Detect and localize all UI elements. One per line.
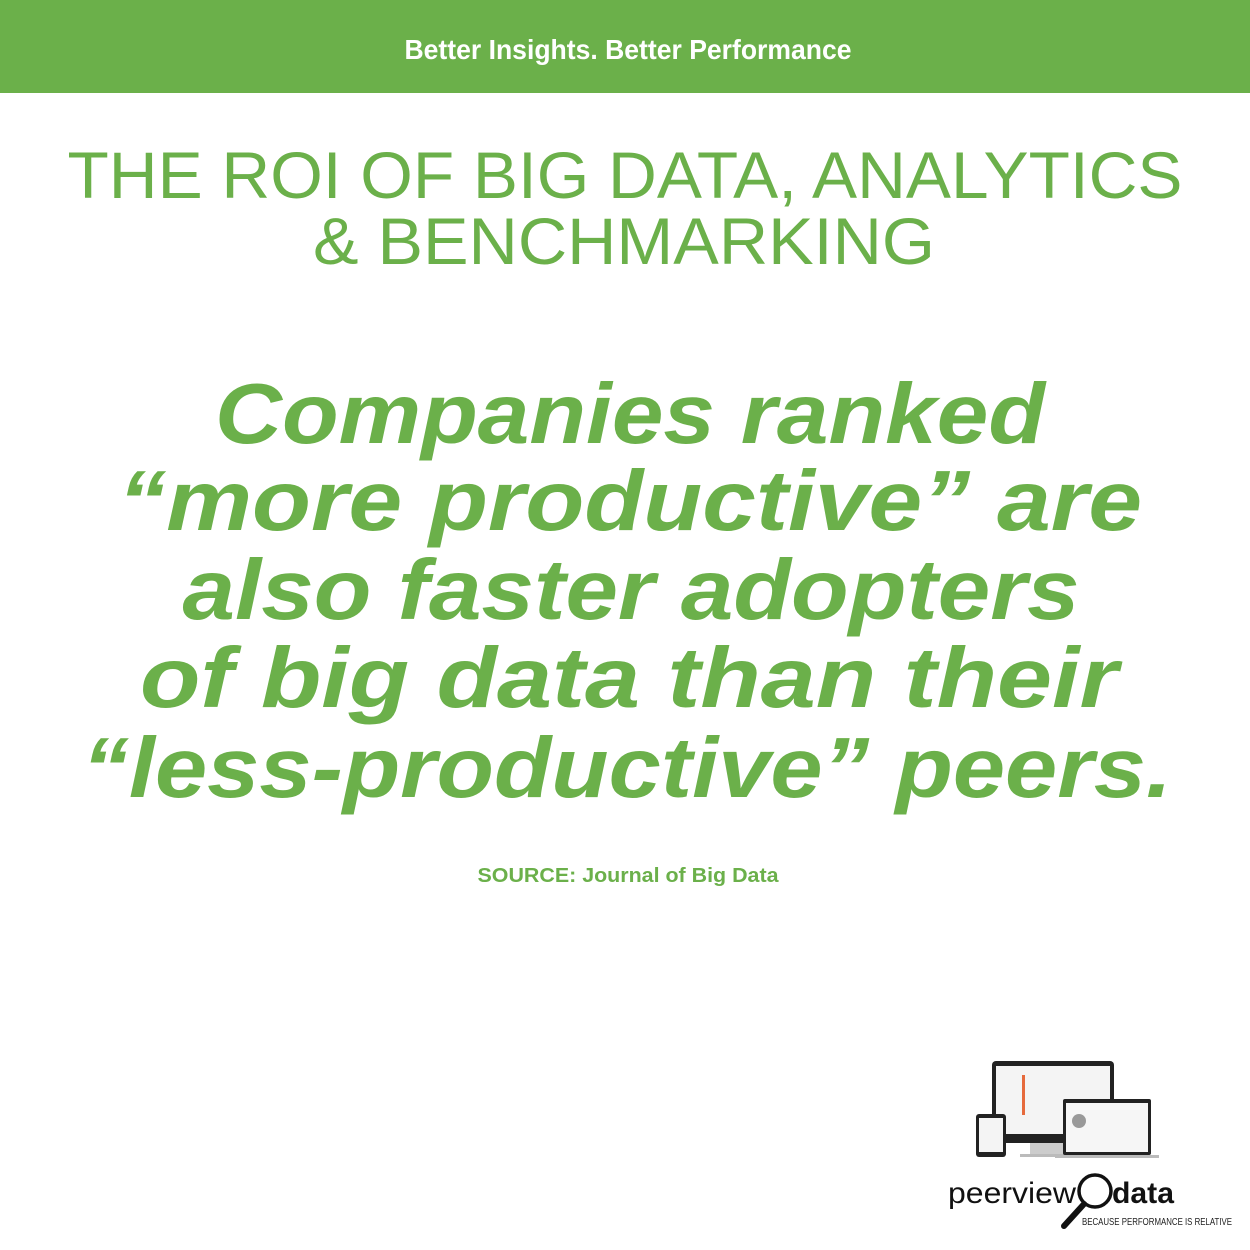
main quote: also faster adopters xyxy=(182,543,1080,638)
header tagline: Better Insights. Better Performance xyxy=(404,34,852,65)
title: & BENCHMARKING xyxy=(313,204,935,278)
header bar xyxy=(0,0,1250,93)
title xyxy=(68,138,1182,278)
logo: wordmark: data xyxy=(1112,1177,1174,1210)
main quote: of big data than their xyxy=(140,631,1123,726)
main quote xyxy=(82,367,1172,816)
logo: wordmark: peerview xyxy=(948,1177,1076,1210)
main quote: “more productive” are xyxy=(118,454,1142,549)
main quote: Companies ranked xyxy=(215,367,1047,462)
source: SOURCE: Journal of Big Data xyxy=(478,865,779,887)
logo: wordmark xyxy=(948,1175,1232,1228)
title: THE ROI OF BIG DATA, ANALYTICS xyxy=(68,138,1182,212)
main quote: “less-productive” peers. xyxy=(82,721,1172,816)
logo: devices xyxy=(976,1061,1159,1158)
